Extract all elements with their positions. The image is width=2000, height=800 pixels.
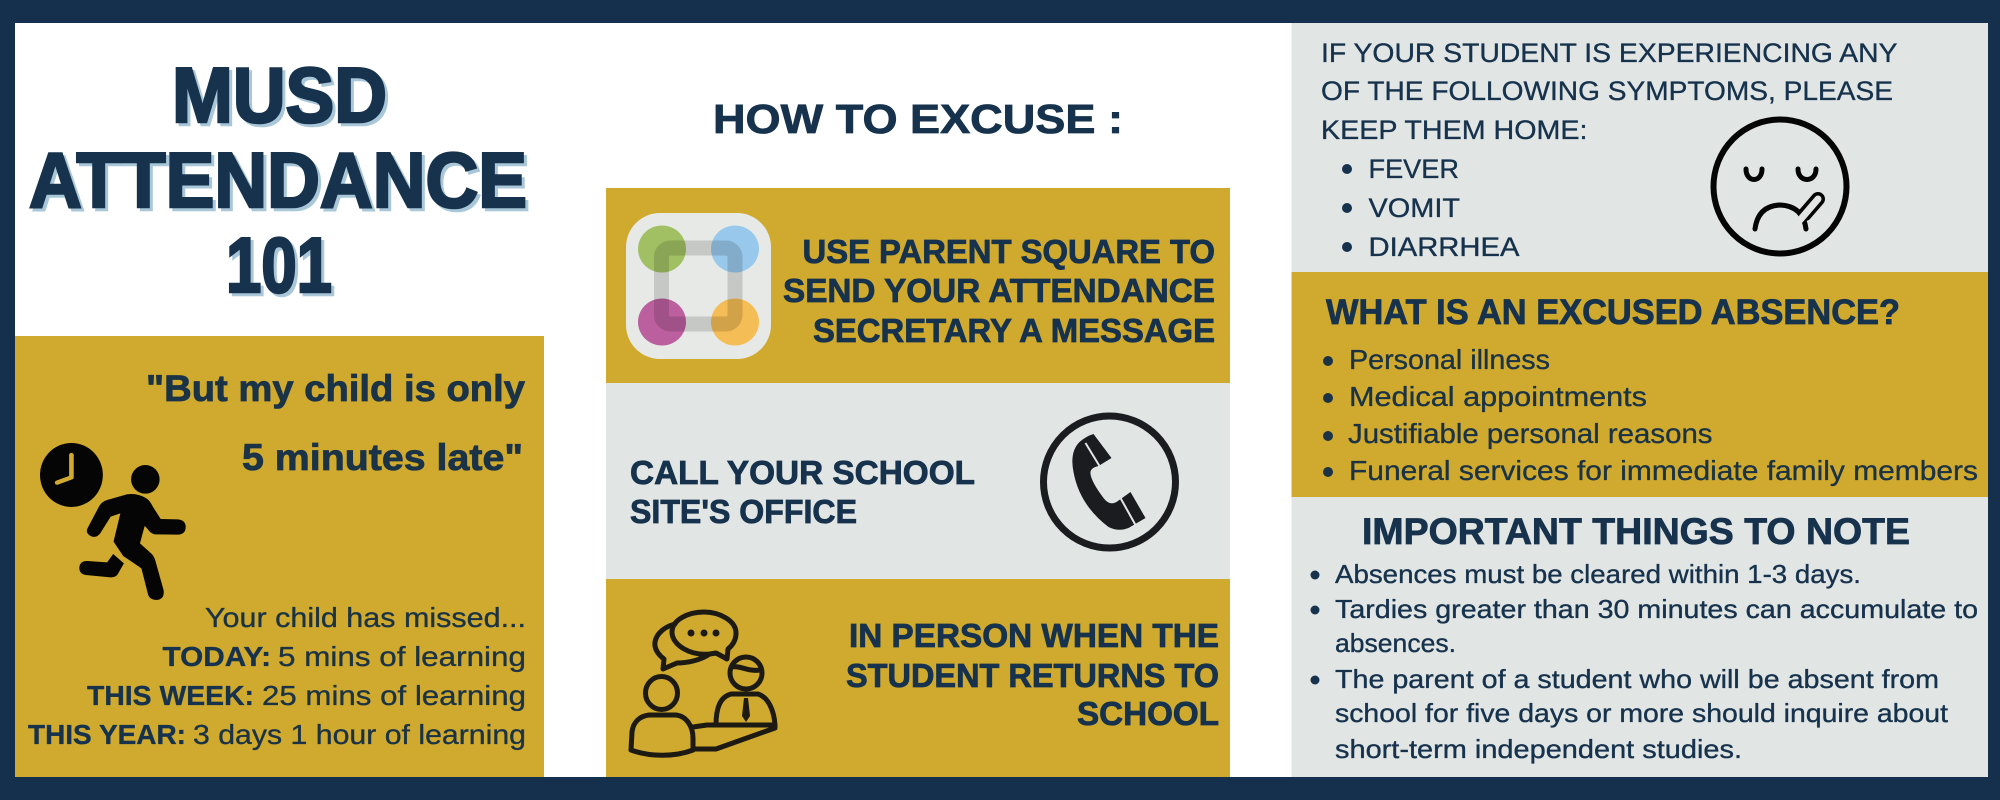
missed learning text: THIS YEAR: — [28, 719, 186, 750]
panel: in person — [606, 579, 1230, 777]
important things list: school for five days or more should inquire about — [1335, 698, 1949, 728]
title: 101 — [229, 224, 335, 312]
title: MUSD — [175, 54, 390, 142]
excused absence list: Justifiable personal reasons — [1348, 418, 1712, 449]
title: 101 — [226, 221, 332, 309]
quote heading — [146, 368, 525, 478]
excused absence list: Medical appointments — [1349, 381, 1647, 412]
excused absence heading: WHAT IS AN EXCUSED ABSENCE? — [1326, 293, 1900, 332]
missed learning text: 25 mins of learning — [262, 680, 526, 711]
important things list: Tardies greater than 30 minutes can accumulate to — [1335, 594, 1978, 624]
symptoms list — [1342, 154, 1520, 262]
symptoms intro text: KEEP THEM HOME: — [1321, 115, 1588, 145]
important things list: absences. — [1335, 628, 1456, 658]
in person text: IN PERSON WHEN THE — [849, 617, 1219, 654]
panel: parent square — [606, 188, 1230, 383]
excused absence list: Personal illness — [1349, 344, 1550, 375]
missed learning text: TODAY: — [162, 641, 271, 672]
in person text: STUDENT RETURNS TO — [846, 657, 1219, 694]
quote heading: "But my child is only — [146, 368, 525, 409]
panel: excused absence — [1292, 272, 1988, 497]
important things list: The parent of a student who will be absent from — [1335, 664, 1939, 694]
in person text — [846, 617, 1219, 732]
in person text: SCHOOL — [1077, 695, 1219, 732]
title — [29, 51, 530, 312]
excused absence list — [1323, 344, 1978, 486]
title: ATTENDANCE — [32, 139, 530, 227]
parent square text: SECRETARY A MESSAGE — [813, 312, 1215, 349]
icon: telephone — [1044, 416, 1176, 548]
missed learning text: 5 mins of learning — [278, 641, 526, 672]
missed learning text: Your child has missed... — [205, 602, 526, 633]
call school text: CALL YOUR SCHOOL — [630, 454, 975, 491]
missed learning text: 3 days 1 hour of learning — [193, 719, 526, 750]
important things list: Absences must be cleared within 1-3 days. — [1335, 559, 1861, 589]
missed learning text — [28, 602, 526, 750]
panel: call school — [606, 383, 1230, 579]
symptoms list: VOMIT — [1368, 193, 1460, 223]
symptoms list: DIARRHEA — [1368, 232, 1520, 262]
important things list — [1310, 559, 1978, 764]
title: MUSD — [172, 51, 387, 139]
excused absence list: Funeral services for immediate family members — [1349, 455, 1978, 486]
parent square text: SEND YOUR ATTENDANCE — [783, 272, 1215, 309]
icon: in person conversation — [631, 612, 775, 755]
quote heading: 5 minutes late" — [242, 437, 523, 478]
icon: parent square logo — [626, 213, 771, 359]
panel: five minutes late — [15, 336, 544, 777]
call school text — [630, 454, 975, 530]
panel: symptoms — [1292, 23, 1988, 272]
icon: running late with clock — [40, 443, 186, 600]
missed learning text: THIS WEEK: — [87, 680, 254, 711]
important things heading: IMPORTANT THINGS TO NOTE — [1362, 511, 1910, 552]
heading: how to excuse: HOW TO EXCUSE : — [713, 96, 1123, 142]
call school text: SITE'S OFFICE — [630, 493, 857, 530]
symptoms intro text: OF THE FOLLOWING SYMPTOMS, PLEASE — [1321, 76, 1893, 106]
title: ATTENDANCE — [29, 136, 527, 224]
parent square text — [783, 233, 1215, 349]
symptoms list: FEVER — [1368, 154, 1459, 184]
important things list: short-term independent studies. — [1335, 734, 1742, 764]
panel: important things to note — [1292, 497, 1988, 777]
symptoms intro text — [1321, 38, 1898, 145]
parent square text: USE PARENT SQUARE TO — [802, 233, 1215, 270]
symptoms intro text: IF YOUR STUDENT IS EXPERIENCING ANY — [1321, 38, 1898, 68]
icon: sick face with thermometer — [1714, 120, 1846, 254]
